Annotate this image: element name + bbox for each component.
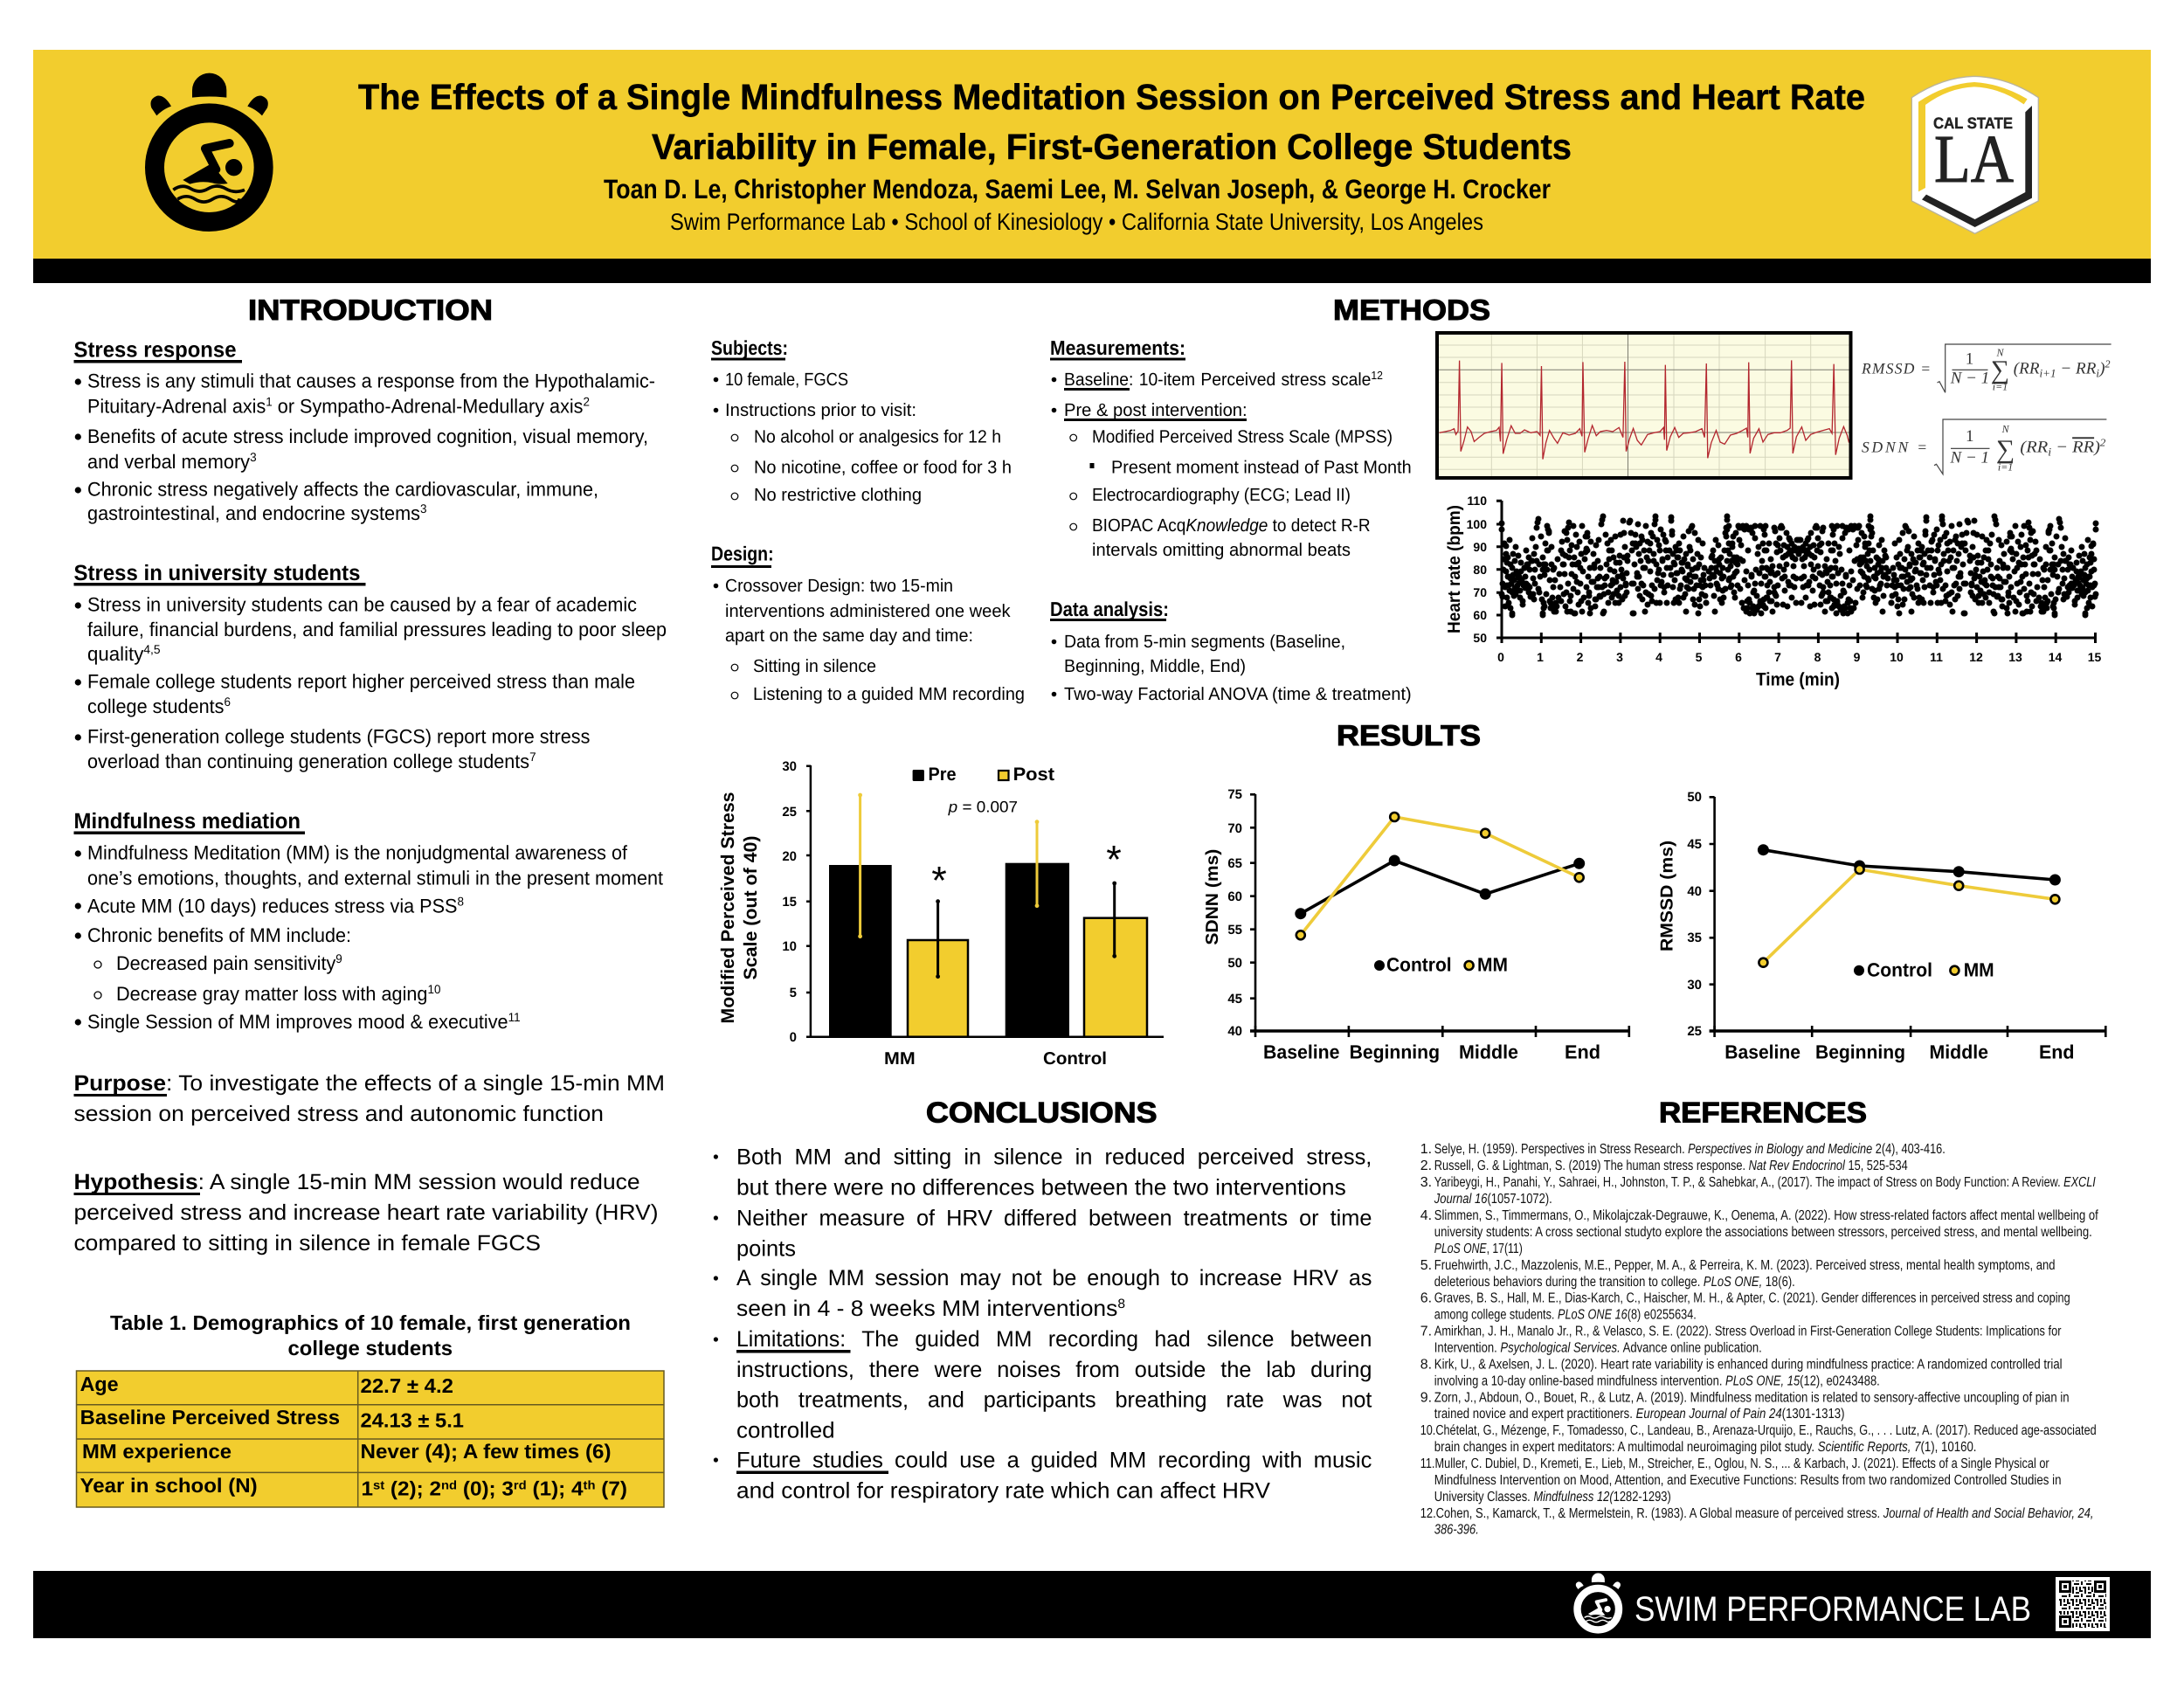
text block: conclusion bullets: points (736, 1236, 796, 1261)
chart: RMSSD line: Baseline (1724, 1041, 1800, 1063)
chart: perceived stress bars: 15 (782, 895, 797, 910)
demographics table: st (373, 1478, 385, 1492)
text block: subjects: 10 female, FGCS (725, 370, 848, 390)
text block: conclusion bullets: Neither measure of HRV differed between treatments or time (736, 1206, 1372, 1230)
demographics table: (1); 4 (527, 1477, 584, 1500)
chart: heart rate scatter: 8 (1814, 650, 1821, 664)
panel: references (1420, 1096, 2098, 1538)
text block: stress response: or Sympatho-Adrenal-Medullary axis (273, 396, 584, 418)
text block: mindfulness mediation: 10 (427, 982, 441, 996)
text block: reference list: Russell, G. & Lightman, S. (2019) The human stress response. Nat Rev Endocrinol 15, 525-534 (1434, 1159, 1908, 1173)
text block: reference list: University Classes. Mindfulness 12(1282-1293) (1434, 1490, 1671, 1505)
text block: mindfulness mediation: Single Session of MM improves mood & executive (87, 1011, 524, 1033)
formula: RMSSD: i+1 (2040, 366, 2056, 379)
text block: purpose: Purpose: To investigate the effects of a single 15-min MM (73, 1071, 665, 1096)
chart: heart rate scatter: 100 (1467, 517, 1487, 531)
chart: SDNN line: Baseline (1263, 1041, 1340, 1063)
text block: data analysis (1050, 598, 1412, 704)
chart: heart rate scatter: 9 (1854, 650, 1861, 664)
formula: RMSSD: 1 (1966, 350, 1973, 369)
text block: conclusion bullets: Both MM and sitting in silence in reduced perceived stress, (736, 1145, 1372, 1169)
chart: RMSSD line: End (2039, 1041, 2074, 1063)
text block: design: apart on the same day and time: (725, 626, 973, 646)
text block: reference list: involving a 10-day online-based mindfulness intervention. PLoS ONE, 15(12), e0243488. (1434, 1373, 1880, 1388)
title: The Effects of a Single Mindfulness Meditation Session on Perceived Stress and Heart Rate (358, 77, 1865, 117)
formula: SDNN: SDNN = (1862, 438, 1927, 455)
text block: subjects: Instructions prior to visit: (725, 400, 916, 420)
chart: heart rate scatter: 70 (1473, 585, 1487, 599)
text block: hypothesis (73, 1170, 659, 1256)
demographics table: nd (441, 1478, 457, 1492)
formula: RMSSD: i=1 (1993, 381, 2008, 393)
text block: stress response: Chronic stress negatively affects the cardiovascular, immune, (87, 478, 598, 500)
text block: mindfulness mediation: 11 (508, 1010, 521, 1024)
text block: measurements: 12 (1371, 369, 1383, 382)
text block: data analysis: Data from 5-min segments (Baseline, (1064, 632, 1345, 652)
icon: stopwatch swimmer logo (150, 73, 268, 222)
text block: stress in university students: Stress in university students (73, 561, 360, 585)
chart: SDNN line: Middle (1459, 1041, 1518, 1063)
chart: heart rate scatter: 80 (1473, 563, 1487, 577)
text block: stress response: 3 (250, 450, 257, 464)
text block: reference list: Fruehwirth, J.C., Mazzolenis, M.E., Pepper, M. A., & Perreira, K. M. (2023). Perceived stress, mental health symptoms, and (1434, 1258, 2055, 1273)
text block: stress response: 1 (266, 395, 273, 409)
demographics table: 22.7 ± 4.2 (360, 1374, 453, 1397)
text block: measurements: Pre & post intervention: (1064, 400, 1248, 420)
heading: conclusions: CONCLUSIONS (926, 1096, 1157, 1128)
text block: measurements: Measurements: (1050, 336, 1185, 359)
formula: SDNN: ∑ (1996, 435, 2015, 464)
text block: stress in university students: quality (87, 643, 144, 665)
table title (110, 1311, 631, 1359)
formula: RMSSD (1861, 344, 2111, 393)
formula: SDNN: i (2048, 445, 2052, 458)
text block: mindfulness mediation: 9 (335, 951, 342, 965)
text block: stress response: Stress is any stimuli that causes a response from the Hypothalamic- (87, 370, 655, 392)
text block: conclusion bullets: 8 (1117, 1297, 1125, 1311)
formula: RMSSD: ) (2098, 359, 2105, 377)
text block: conclusion bullets: and control for respiratory rate which can affect HRV (736, 1478, 1270, 1503)
formula: SDNN: 1 (1966, 427, 1974, 446)
text block: reference list: Intervention. Psychological Services. Advance online publication. (1434, 1340, 1762, 1356)
formula: SDNN: i=1 (1998, 460, 2013, 473)
chart: perceived stress bars (718, 759, 1164, 1069)
demographics table: (7) (596, 1477, 627, 1500)
text block: measurements: Present moment instead of Past Month (1111, 458, 1412, 478)
text block: mindfulness mediation: Acute MM (10 days) reduces stress via PSS (87, 895, 472, 917)
chart: RMSSD line: RMSSD (ms) (1657, 841, 1676, 951)
text block: stress in university students: college students (87, 695, 230, 717)
text block: reference list: among college students. PLoS ONE 16(8) e0255634. (1434, 1308, 1697, 1323)
text block: mindfulness mediation: 8 (457, 894, 464, 908)
text block: measurements: intervals omitting abnormal beats (1092, 540, 1351, 560)
chart: perceived stress bars: * (931, 858, 947, 903)
text block: data analysis: Data analysis: (1050, 598, 1169, 620)
text block: stress in university students: Female college students report higher perceived stress than male (87, 670, 635, 692)
table title: college students (288, 1337, 453, 1359)
formula: SDNN: (RR (2020, 438, 2046, 456)
heading: introduction: INTRODUCTION (248, 294, 493, 326)
text block: conclusion bullets: Future studies could use a guided MM recording with music (736, 1448, 1372, 1472)
text block: stress in university students: Stress in university students can be caused by a fear of academic (87, 593, 637, 615)
heading: results: RESULTS (1337, 719, 1481, 751)
chart: perceived stress bars: 10 (782, 939, 797, 954)
title: Variability in Female, First-Generation College Students (652, 127, 1572, 167)
chart: SDNN line: End (1565, 1041, 1600, 1063)
text block: conclusion bullets (714, 1145, 1372, 1503)
chart: RMSSD line: 45 (1687, 837, 1702, 852)
text block: hypothesis: compared to sitting in silence in female FGCS (73, 1231, 541, 1256)
text block: reference list (1420, 1142, 2098, 1538)
icon: Cal State LA shield (1911, 76, 2038, 233)
affiliation: Swim Performance Lab • School of Kinesiology • California State University, Los Angeles (670, 209, 1483, 235)
chart: heart rate scatter (1445, 494, 2101, 689)
text block: conclusion bullets: but there were no differences between the two interventions (736, 1175, 1346, 1200)
text block: mindfulness mediation: Decreased pain sensitivity (116, 952, 344, 974)
text block: stress response: Benefits of acute stress include improved cognition, visual memory, (87, 425, 648, 447)
heading: methods: METHODS (1333, 294, 1490, 326)
text block: stress in university students: First-generation college students (FGCS) report more stress (87, 725, 590, 748)
chart: heart rate scatter: 90 (1473, 540, 1487, 554)
formula: RMSSD: N (1995, 346, 2004, 358)
chart: SDNN line: 70 (1227, 821, 1242, 836)
text block: reference list: Selye, H. (1959). Perspectives in Stress Research. Perspectives in Biology and Medicine 2(4), 403-416. (1434, 1142, 1946, 1157)
demographics table (77, 1371, 664, 1507)
formula: RMSSD: RMSSD = (1861, 359, 1931, 377)
chart: SDNN line: 75 (1227, 787, 1242, 802)
text block: stress in university students: 4,5 (143, 642, 161, 656)
chart: RMSSD line: MM (1964, 958, 1994, 980)
chart: SDNN line: 50 (1227, 956, 1242, 971)
text block: stress in university students: overload than continuing generation college students (87, 751, 548, 772)
text block: design: Crossover Design: two 15-min (725, 576, 953, 596)
text block: purpose (73, 1071, 665, 1126)
text block: reference list: Kirk, U., & Axelsen, J. L. (2020). Heart rate variability is enhanced during mindfulness practice: A randomized controlled trial (1434, 1357, 2063, 1372)
footer bar (33, 1571, 2151, 1638)
text block: measurements: BIOPAC AcqKnowledge to detect R-R (1092, 515, 1371, 536)
chart: perceived stress bars: 20 (782, 849, 797, 864)
text block: conclusion bullets: controlled (736, 1419, 835, 1443)
chart: SDNN line: 55 (1227, 923, 1242, 937)
chart: heart rate scatter: 11 (1930, 650, 1943, 664)
formula: RMSSD: N − 1 (1950, 369, 1989, 387)
chart: heart rate scatter: 3 (1616, 650, 1623, 664)
chart: heart rate scatter: Heart rate (bpm) (1445, 505, 1464, 633)
formula: SDNN: RR) (2072, 438, 2099, 456)
text block: subjects: No restrictive clothing (754, 485, 922, 505)
text block: measurements: Electrocardiography (ECG; Lead II) (1092, 485, 1351, 505)
chart: heart rate scatter: 15 (2088, 650, 2101, 664)
chart: perceived stress bars: Post (1013, 764, 1054, 785)
panel: results (718, 719, 2105, 1069)
text block: stress in university students: failure, financial burdens, and familial pressures leading to poor sleep (87, 619, 667, 640)
chart: heart rate scatter: 1 (1537, 650, 1544, 664)
chart: SDNN line: 60 (1227, 889, 1242, 904)
demographics table: rd (514, 1478, 527, 1492)
chart: perceived stress bars: 5 (790, 986, 797, 1000)
text block: stress response: 3 (420, 502, 427, 515)
icon: Cal State LA shield: LA (1934, 121, 2014, 197)
text block: reference list: PLoS ONE, 17(11) (1434, 1242, 1523, 1256)
chart: SDNN line (1203, 787, 1629, 1063)
formula: SDNN (1862, 419, 2106, 474)
chart: SDNN line: 45 (1227, 992, 1242, 1007)
chart: heart rate scatter: 14 (2049, 650, 2062, 664)
text block: measurements: Baseline: 10-item Perceived stress scale (1064, 370, 1390, 390)
chart: heart rate scatter: 12 (1969, 650, 1983, 664)
chart: SDNN line: Beginning (1350, 1041, 1440, 1063)
scatter points (1502, 516, 2096, 615)
text block: stress response (73, 337, 655, 524)
demographics table: th (584, 1478, 596, 1492)
formula: SDNN: − (2051, 438, 2072, 456)
text block: design: Listening to a guided MM recording (753, 684, 1025, 704)
chart: heart rate scatter: 0 (1497, 650, 1504, 664)
demographics table: (0); 3 (457, 1477, 514, 1500)
chart: heart rate scatter: 110 (1467, 494, 1487, 508)
chart: perceived stress bars: 25 (782, 805, 797, 820)
chart: perceived stress bars: 0 (790, 1030, 797, 1045)
chart: SDNN line: Control (1386, 954, 1452, 976)
chart: heart rate scatter: 5 (1696, 650, 1703, 664)
text block: reference list: 12.Cohen, S., Kamarck, T., & Mermelstein, R. (1983). A Global measure of perceived stress. Journal of Health and Social Behavior, 24, (1420, 1506, 2093, 1521)
text block: mindfulness mediation (73, 809, 664, 1033)
chart: RMSSD line: 35 (1687, 930, 1702, 945)
formula: RMSSD: − RR (2056, 359, 2097, 377)
demographics table: Age (80, 1373, 119, 1395)
authors: Toan D. Le, Christopher Mendoza, Saemi Lee, M. Selvan Joseph, & George H. Crocker (604, 174, 1551, 204)
chart: perceived stress bars: Modified Perceived Stress (718, 792, 738, 1024)
chart: SDNN line: MM (1477, 954, 1508, 976)
chart: heart rate scatter: 2 (1577, 650, 1584, 664)
formula: RMSSD: (RR (2014, 359, 2039, 377)
chart: heart rate scatter: 13 (2008, 650, 2022, 664)
demographics table: Baseline Perceived Stress (80, 1406, 340, 1429)
text block: measurements: Modified Perceived Stress Scale (MPSS) (1092, 427, 1393, 447)
chart: SDNN line: 40 (1227, 1024, 1242, 1039)
title (358, 77, 1865, 167)
text block: design (711, 543, 1025, 704)
text block: subjects: No nicotine, coffee or food for 3 h (754, 458, 1012, 478)
chart: RMSSD line (1657, 790, 2105, 1063)
text block: subjects (711, 336, 1012, 505)
text block: reference list: 2. (1420, 1159, 1432, 1173)
table title: Table 1. Demographics of 10 female, first generation (110, 1311, 631, 1334)
text block: data analysis: Two-way Factorial ANOVA (time & treatment) (1064, 684, 1412, 704)
text block: reference list: 1. (1420, 1142, 1432, 1157)
formula: SDNN: 2 (2100, 436, 2105, 448)
text block: conclusion bullets: instructions, there were noises from outside the lab during (736, 1358, 1372, 1382)
chart: heart rate scatter: 50 (1473, 631, 1487, 645)
chart: SDNN line: SDNN (ms) (1203, 849, 1222, 945)
text block: data analysis: Beginning, Middle, End) (1064, 656, 1246, 676)
chart: perceived stress bars: p = 0.007 (948, 798, 1018, 815)
text block: reference list: brain changes in expert meditators: A multimodal neuroimaging pilot study. Scientific Reports, 7(1), 10160. (1434, 1440, 1976, 1455)
text block: stress response: Pituitary-Adrenal axis (87, 396, 273, 418)
text block: reference list: 9. (1420, 1390, 1432, 1405)
formula: RMSSD: 2 (2105, 357, 2111, 370)
text block: reference list: Journal 16(1057-1072). (1434, 1192, 1552, 1207)
chart: heart rate scatter: 7 (1774, 650, 1781, 664)
text block: measurements (1050, 336, 1412, 560)
chart: perceived stress bars: 30 (782, 759, 797, 774)
text block: reference list: 5. (1420, 1258, 1432, 1273)
panel: methods (711, 294, 2111, 704)
formula: RMSSD: ∑ (1991, 356, 2009, 384)
chart: SDNN line: 65 (1227, 856, 1242, 871)
chart: RMSSD line: Control (1867, 958, 1932, 980)
demographics table: MM experience (82, 1440, 232, 1463)
chart: heart rate scatter: 10 (1890, 650, 1904, 664)
panel: introduction (73, 294, 667, 1507)
text block: stress in university students (73, 561, 667, 772)
text block: stress in university students: 6 (224, 695, 231, 709)
text block: design: Sitting in silence (753, 656, 876, 676)
demographics table: Never (4); A few times (6) (360, 1440, 612, 1463)
chart: RMSSD line: 30 (1687, 978, 1702, 993)
text block: reference list: 3. (1420, 1175, 1432, 1190)
chart: RMSSD line: 25 (1687, 1024, 1702, 1039)
text block: reference list: Zorn, J., Abdoun, O., Bouet, R., & Lutz, A. (2019). Mindfulness meditation is related to sensory-affective uncoupling of pian in (1434, 1390, 2070, 1405)
chart: perceived stress bars: Pre (928, 764, 956, 785)
text block: hypothesis: perceived stress and increase heart rate variability (HRV) (73, 1200, 659, 1225)
text block: reference list: 386-396. (1434, 1523, 1479, 1538)
text block: design: interventions administered one week (725, 601, 1011, 621)
text block: purpose: session on perceived stress and autonomic function (73, 1102, 604, 1126)
text block: reference list: 6. (1420, 1291, 1432, 1306)
chart: heart rate scatter: 4 (1655, 650, 1662, 664)
demographics table: (2); 2 (384, 1477, 441, 1500)
demographics table: Year in school (N) (80, 1474, 258, 1497)
text block: subjects: No alcohol or analgesics for 12 h (754, 427, 1001, 447)
text block: conclusion bullets: seen in 4 - 8 weeks MM interventions (736, 1297, 1104, 1321)
demographics table: 1 (362, 1477, 372, 1500)
chart: RMSSD line: Middle (1929, 1041, 1988, 1063)
text block: stress response: and verbal memory (87, 451, 256, 473)
text block: stress response: Stress response (73, 337, 237, 362)
panel: conclusions (714, 1096, 1372, 1503)
text block: reference list: trained novice and expert practitioners. European Journal of Pain 24(1301-1313) (1434, 1407, 1845, 1422)
footer lab name: SWIM PERFORMANCE LAB (1635, 1590, 2031, 1629)
chart: perceived stress bars: Scale (out of 40) (741, 835, 761, 980)
text block: conclusion bullets: Limitations: The guided MM recording had silence between (736, 1327, 1372, 1352)
header banner (33, 50, 2151, 283)
demographics table: 24.13 ± 5.1 (360, 1408, 464, 1431)
text block: mindfulness mediation: Mindfulness mediation (73, 809, 301, 834)
text block: stress in university students: 7 (529, 750, 536, 764)
text block: mindfulness mediation: Mindfulness Meditation (MM) is the nonjudgmental awareness of (87, 842, 628, 864)
formula: RMSSD: i (2096, 366, 2099, 379)
chart: RMSSD line: Beginning (1815, 1041, 1905, 1063)
text block: stress response: 2 (584, 395, 590, 409)
chart: heart rate scatter: 60 (1473, 608, 1487, 622)
text block: reference list: Mindfulness Intervention on Mood, Attention, and Executive Functions: Results from two randomized Controlled Studies in (1434, 1473, 2062, 1488)
chart: heart rate scatter: Time (min) (1756, 669, 1840, 689)
text block: hypothesis: Hypothesis : A single 15-min MM session would reduce (73, 1170, 639, 1194)
text block: reference list: deleterious behaviors during the transition to college. PLoS ONE, 18(6). (1434, 1275, 1795, 1290)
chart: perceived stress bars: * (1106, 837, 1122, 882)
icon: QR code (2056, 1577, 2110, 1631)
chart: heart rate scatter: 6 (1735, 650, 1742, 664)
icon: Cal State LA shield: CAL STATE (1933, 114, 2013, 132)
formula: SDNN: N − 1 (1950, 448, 1989, 467)
chart: perceived stress bars: Control (1043, 1049, 1107, 1069)
text block: design: Design: (711, 543, 774, 565)
text block: mindfulness mediation: Decrease gray matter loss with aging (116, 983, 439, 1005)
text block: stress response: gastrointestinal, and endocrine systems (87, 502, 432, 524)
text block: reference list: 7. (1420, 1325, 1432, 1339)
text block: mindfulness mediation: Chronic benefits of MM include: (87, 924, 351, 946)
chart: ECG trace (1437, 333, 1850, 478)
chart: perceived stress bars: MM (884, 1049, 916, 1069)
text block: reference list: 4. (1420, 1208, 1432, 1223)
text block: subjects: Subjects: (711, 336, 788, 359)
formula: SDNN: N (2001, 423, 2010, 435)
text block: conclusion bullets: both treatments, and participants breathing rate was not (736, 1388, 1372, 1413)
chart: RMSSD line: 40 (1687, 884, 1702, 899)
text block: conclusion bullets: A single MM session may not be enough to increase HRV as (736, 1266, 1372, 1290)
heading: references: REFERENCES (1659, 1096, 1867, 1129)
icon: footer stopwatch logo (1576, 1574, 1621, 1629)
chart: RMSSD line: 50 (1687, 790, 1702, 805)
text block: reference list: 8. (1420, 1357, 1432, 1372)
text block: mindfulness mediation: one’s emotions, thoughts, and external stimuli in the present moment (87, 868, 664, 889)
